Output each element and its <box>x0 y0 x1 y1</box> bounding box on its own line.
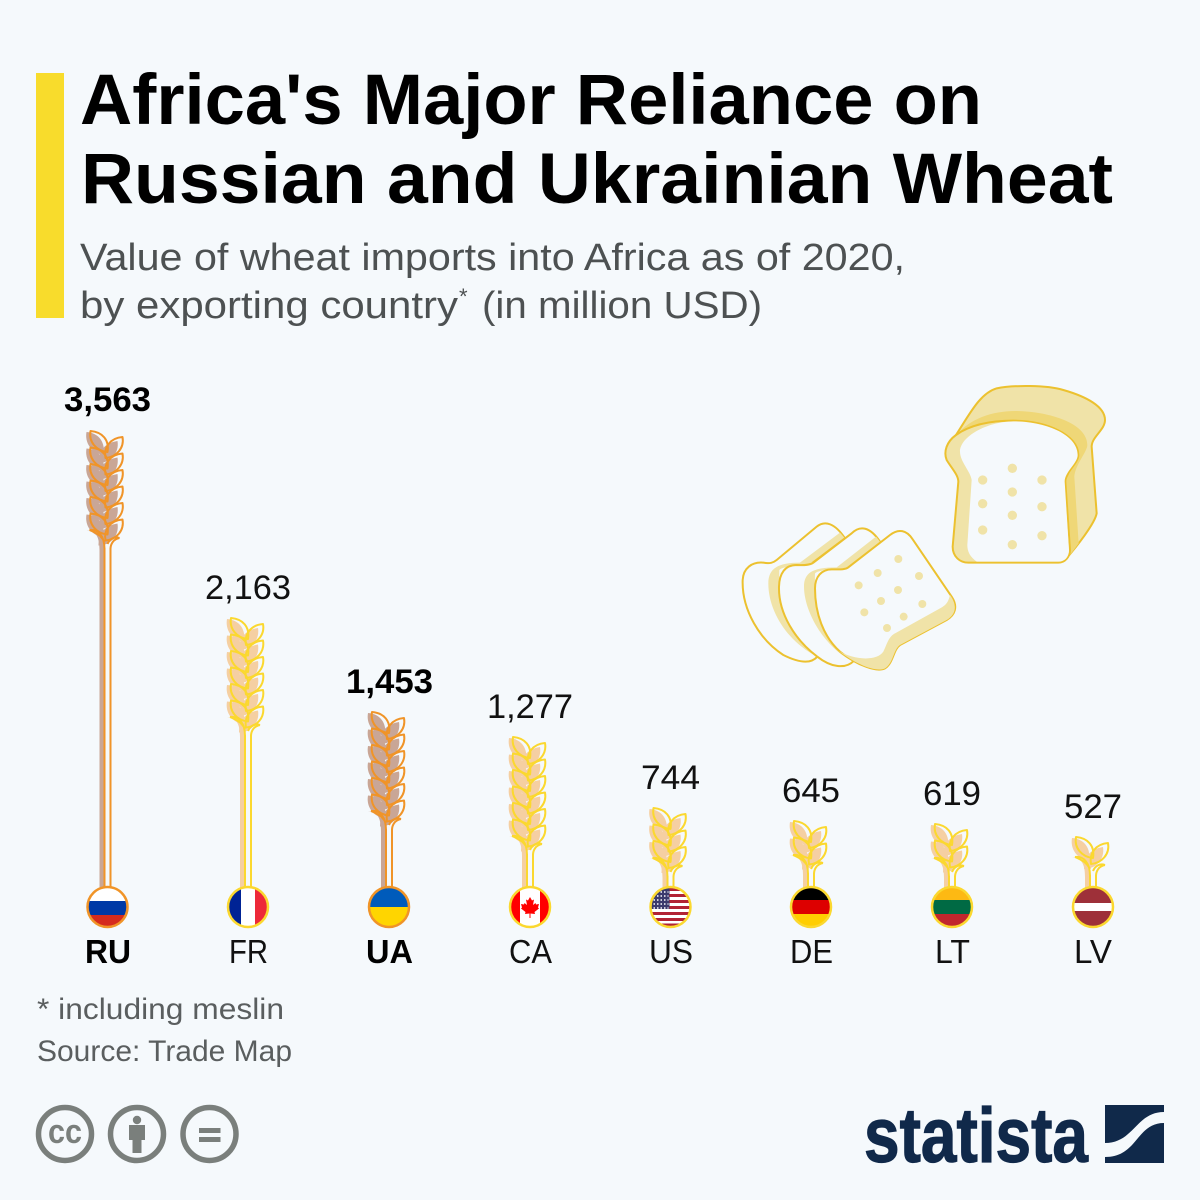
flag: Ukraine <box>368 886 410 928</box>
flag: Germany <box>790 886 832 928</box>
subtitle: (in million USD) <box>482 285 762 327</box>
flag: Canada <box>509 886 551 928</box>
bar: UA 1,453 <box>346 663 433 970</box>
bar: CA 1,277: CA <box>509 933 552 970</box>
bar: LV 527: 527 <box>1064 788 1122 826</box>
bar: RU 3,563 <box>64 381 151 970</box>
flag: Russia <box>86 886 128 928</box>
bar: LV 527: LV <box>1074 933 1112 970</box>
title: Russian and Ukrainian Wheat <box>81 140 1113 219</box>
illustration: bread <box>743 386 1105 670</box>
bar: DE 645: DE <box>790 933 833 970</box>
title <box>80 61 1113 219</box>
bar: DE 645 <box>782 772 840 970</box>
front slice <box>815 531 955 670</box>
bar: CA 1,277: 1,277 <box>487 688 573 726</box>
footnote and source: * including meslin <box>37 993 284 1026</box>
title: Africa's Major Reliance on <box>80 61 982 140</box>
flag: Lithuania <box>931 886 973 928</box>
accent bar <box>36 73 64 318</box>
subtitle <box>80 237 905 327</box>
bar: US 744: US <box>649 933 693 970</box>
bar: RU 3,563: RU <box>85 933 131 970</box>
subtitle: by exporting country <box>80 285 458 327</box>
flag: France <box>227 886 269 928</box>
bar: US 744 <box>641 759 700 970</box>
bar: RU 3,563: 3,563 <box>64 381 151 419</box>
flag: Latvia <box>1072 886 1114 928</box>
bar: FR 2,163: FR <box>229 933 268 970</box>
subtitle: * <box>459 284 468 309</box>
footnote and source: Source: Trade Map <box>37 1035 292 1068</box>
bar: LT 619: 619 <box>923 775 981 813</box>
subtitle: Value of wheat imports into Africa as of 2020, <box>80 237 905 279</box>
bar: FR 2,163 <box>205 569 291 970</box>
flag: United States <box>650 886 692 928</box>
icon: creative commons: cc <box>48 1113 82 1151</box>
bar: US 744: 744 <box>641 759 700 797</box>
bar: LV 527 <box>1064 788 1122 970</box>
bar: FR 2,163: 2,163 <box>205 569 291 607</box>
bar: DE 645: 645 <box>782 772 840 810</box>
rear slice <box>743 523 845 662</box>
footnote and source <box>37 993 292 1068</box>
bar: UA 1,453: 1,453 <box>346 663 433 701</box>
bar: CA 1,277 <box>487 688 573 970</box>
bar: LT 619: LT <box>935 933 970 970</box>
bar: LT 619 <box>923 775 981 970</box>
bar: UA 1,453: UA <box>366 933 413 970</box>
icon: creative commons <box>38 1108 92 1160</box>
middle slice <box>779 528 880 666</box>
loaf <box>945 386 1105 563</box>
statista logo: statista <box>864 1093 1089 1179</box>
icon: no derivatives <box>183 1108 236 1160</box>
icon: attribution <box>110 1108 164 1160</box>
